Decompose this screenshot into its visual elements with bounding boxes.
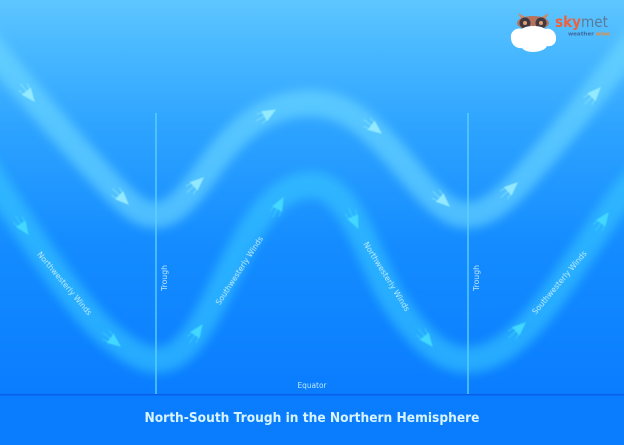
label: equator: Equator (298, 381, 327, 390)
lower band arrows (11, 195, 613, 350)
trough line left (155, 113, 157, 394)
title: North-South Trough in the Northern Hemisphere (144, 410, 480, 426)
logo wordmark: skymet (555, 13, 608, 31)
equator line (0, 394, 624, 396)
upper wind band (0, 35, 624, 215)
label: trough left: Trough (160, 265, 169, 292)
logo: skymet (511, 13, 610, 52)
trough line right (467, 113, 469, 394)
icon: owl on cloud (511, 13, 556, 52)
label: northwesterly winds left: Northwesterly Winds (35, 250, 94, 317)
lower wind band (0, 160, 624, 360)
label: southwesterly winds right: Southwesterly Winds (530, 249, 589, 316)
label: southwesterly winds left: Southwesterly Winds (214, 235, 265, 307)
logo tagline: weather wise (568, 32, 610, 38)
label: trough right: Trough (472, 265, 481, 292)
upper band arrows (16, 80, 604, 210)
label: northwesterly winds right: Northwesterly Winds (361, 240, 411, 313)
